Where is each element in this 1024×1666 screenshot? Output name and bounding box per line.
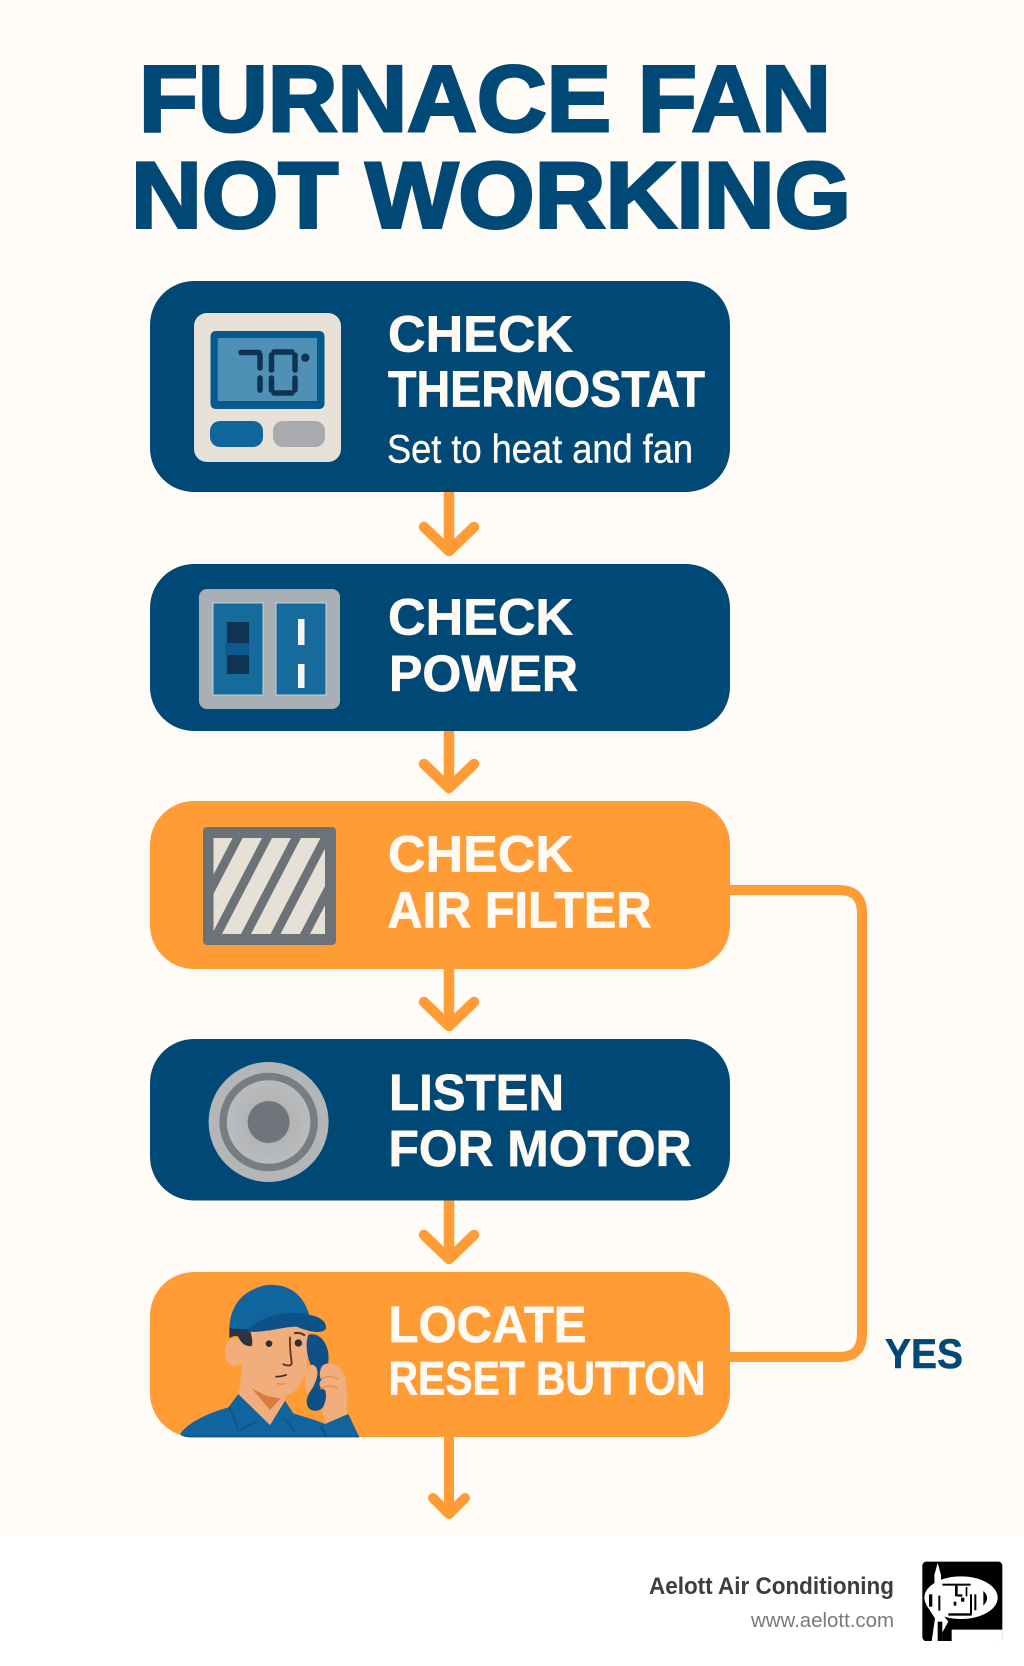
heading: locate reset button: LOCATE bbox=[388, 1296, 586, 1353]
heading: check thermostat: CHECK bbox=[388, 306, 573, 362]
heading: check air filter: CHECK bbox=[388, 826, 573, 882]
panel: check power bbox=[150, 564, 730, 731]
arrow: air filter to motor bbox=[424, 967, 474, 1026]
arrow: power to air filter bbox=[424, 729, 474, 788]
title bbox=[131, 46, 851, 248]
footer: company name, website and logo bbox=[649, 1562, 1002, 1641]
heading: locate reset button bbox=[388, 1296, 706, 1404]
logo bbox=[922, 1562, 1002, 1641]
heading: locate reset button: RESET BUTTON bbox=[388, 1352, 706, 1404]
website: www.aelott.com bbox=[750, 1610, 894, 1632]
icon: thermostat bbox=[194, 313, 341, 462]
heading: check thermostat: THERMOSTAT bbox=[388, 360, 705, 418]
title: FURNACE FAN bbox=[139, 46, 831, 151]
icon: air filter bbox=[203, 827, 336, 945]
heading: check air filter bbox=[388, 826, 652, 938]
heading: listen for motor: FOR MOTOR bbox=[388, 1120, 692, 1177]
panel: check thermostat bbox=[150, 281, 730, 492]
heading: check power bbox=[388, 588, 578, 702]
title: NOT WORKING bbox=[131, 142, 851, 248]
heading: check power: POWER bbox=[389, 645, 578, 702]
panel: check air filter bbox=[150, 801, 730, 969]
icon: power switch bbox=[199, 589, 340, 709]
arrow: motor to reset button bbox=[424, 1199, 474, 1259]
connector: yes loop from air filter to reset button bbox=[728, 890, 862, 1357]
icon: motor bbox=[209, 1062, 329, 1182]
panel: locate reset button bbox=[150, 1272, 730, 1437]
heading: check power: CHECK bbox=[388, 588, 573, 646]
arrow: reset button downward bbox=[433, 1435, 465, 1514]
heading: listen for motor bbox=[388, 1064, 692, 1177]
label: yes: YES bbox=[885, 1330, 963, 1377]
arrow: thermostat to power bbox=[424, 490, 474, 551]
text: set to heat and fan: Set to heat and fan bbox=[387, 428, 693, 472]
company name: Aelott Air Conditioning bbox=[649, 1573, 894, 1600]
heading: check thermostat bbox=[388, 306, 705, 418]
heading: listen for motor: LISTEN bbox=[389, 1064, 564, 1121]
heading: check air filter: AIR FILTER bbox=[388, 882, 652, 938]
icon: technician on phone bbox=[180, 1285, 359, 1437]
panel: listen for motor bbox=[150, 1039, 730, 1200]
